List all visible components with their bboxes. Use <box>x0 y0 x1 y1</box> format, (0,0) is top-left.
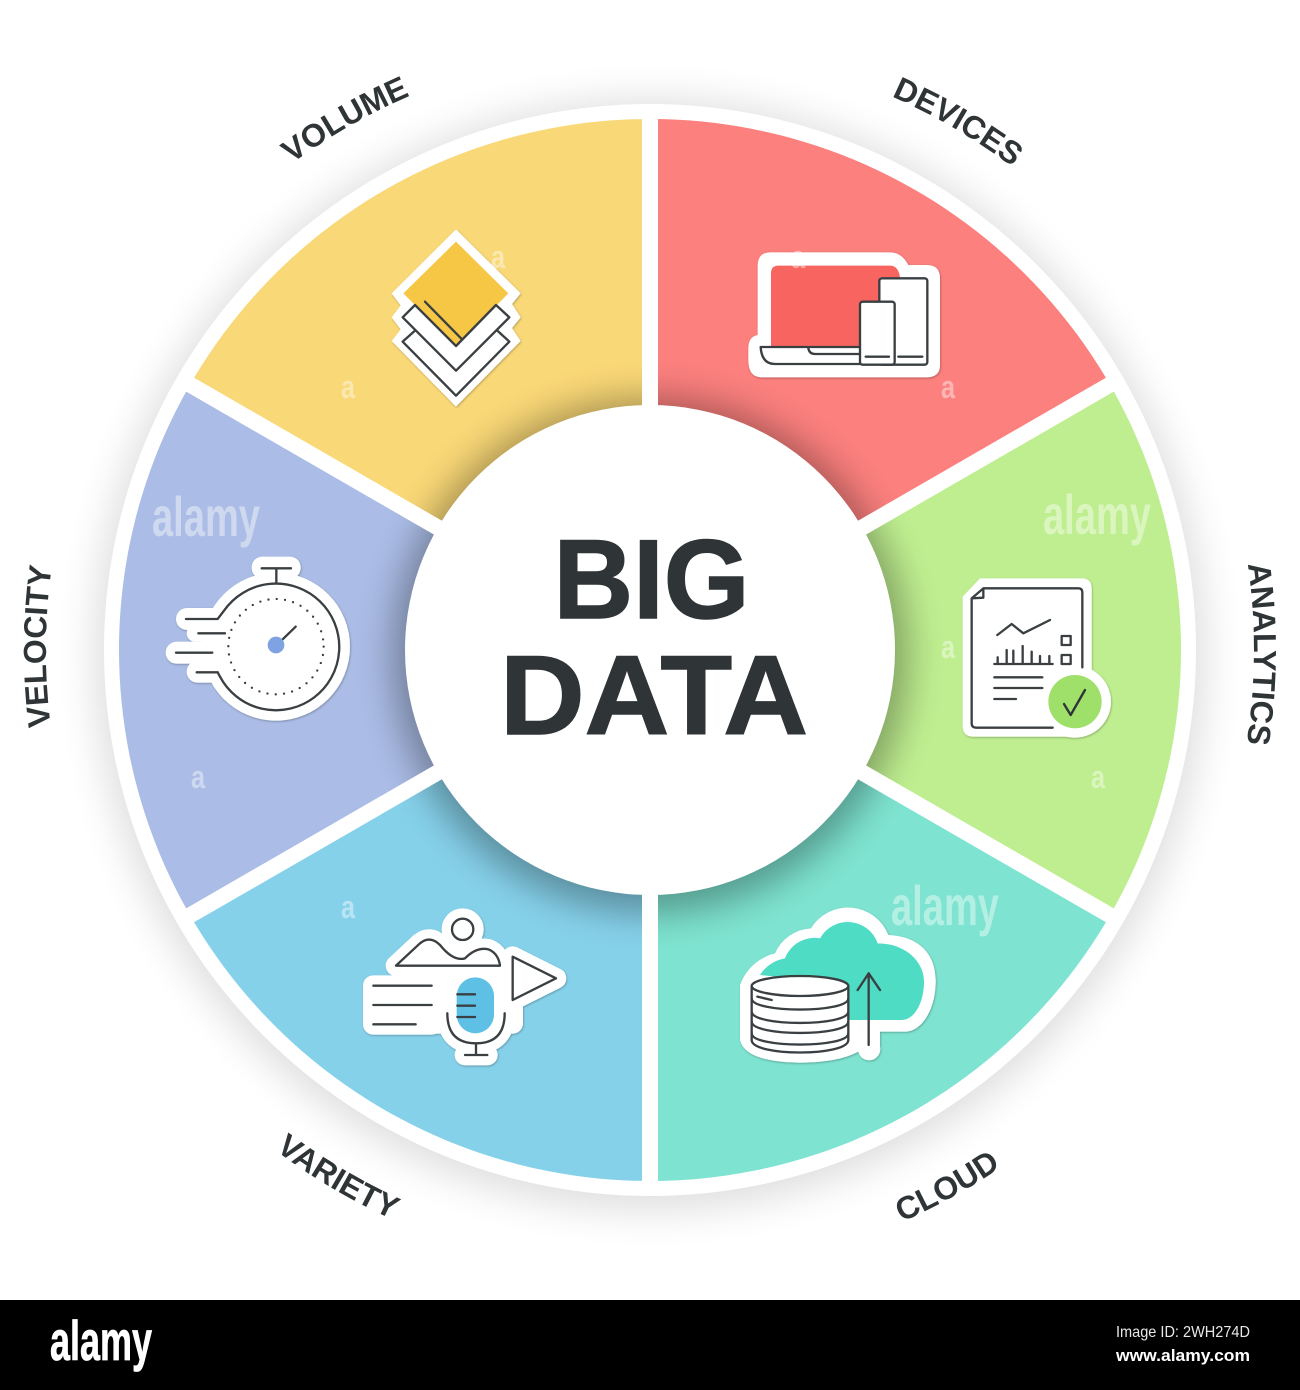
watermarks: alamy <box>1043 483 1151 546</box>
bottom black bar <box>0 1300 1300 1390</box>
icon: cloud database <box>740 908 936 1063</box>
website text: www.alamy.com <box>1115 1346 1250 1365</box>
segment: analytics <box>866 392 1181 908</box>
watermarks: a <box>941 369 955 405</box>
label: cloud: CLOUD <box>896 1153 996 1218</box>
watermarks: alamy <box>891 874 999 937</box>
segment: volume <box>194 119 642 521</box>
icon: analytics report <box>963 578 1111 738</box>
watermarks: a <box>341 369 355 405</box>
title: BIG <box>554 517 750 642</box>
icon: devices <box>748 252 940 377</box>
title: DATA <box>500 633 808 758</box>
watermarks: alamy <box>152 485 260 548</box>
wheel segments <box>119 119 1181 1181</box>
segment: devices <box>658 119 1106 521</box>
icon: volume layers <box>392 229 521 407</box>
watermarks: a <box>791 239 805 275</box>
icon: velocity stopwatch <box>166 557 350 721</box>
title <box>500 517 808 758</box>
watermarks: a <box>341 889 355 925</box>
center circle shadow <box>392 397 908 913</box>
label: analytics: ANALYTICS <box>1248 564 1276 744</box>
center circle <box>405 405 895 895</box>
white segment dividers <box>182 112 1118 1188</box>
watermarks: a <box>941 629 955 665</box>
watermarks <box>152 239 1151 937</box>
watermarks: a <box>1091 759 1105 795</box>
icon: variety media <box>373 919 556 1055</box>
watermarks: a <box>491 239 505 275</box>
label: velocity: VELOCITY <box>24 564 51 728</box>
segment: cloud <box>658 779 1106 1181</box>
label: volume: VOLUME <box>279 76 409 159</box>
alamy logo: alamy <box>50 1309 152 1372</box>
outer wheel shadow <box>95 100 1205 1210</box>
white outer ring <box>104 104 1196 1196</box>
image id text: Image ID: 2WH274D <box>1116 1324 1250 1341</box>
watermarks: a <box>191 759 205 795</box>
segment: velocity <box>119 392 434 908</box>
segment: variety <box>194 779 642 1181</box>
label: variety: VARIETY <box>282 1132 402 1216</box>
label: devices: DEVICES <box>894 77 1022 164</box>
